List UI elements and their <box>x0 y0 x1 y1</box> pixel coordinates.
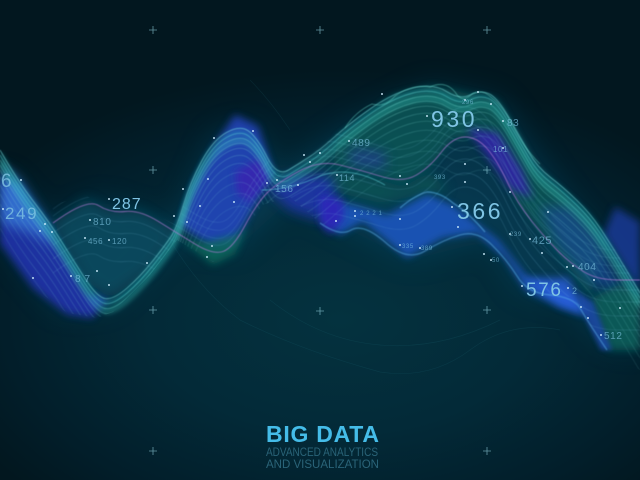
mid-size numbers: 425 <box>532 235 552 247</box>
upper blue patch <box>350 148 385 170</box>
right blue shoulder <box>540 207 626 296</box>
partial number 6: 6 <box>1 171 12 192</box>
wave: soft outer glow <box>0 85 640 350</box>
mid-size numbers: 393 <box>434 175 446 181</box>
left blue and violet lobe <box>0 180 108 318</box>
mid-size numbers: 83 <box>507 118 519 129</box>
title block <box>266 421 379 471</box>
large number 576: 576 <box>526 280 563 301</box>
large number 366: 366 <box>457 198 503 224</box>
number 287: 287 <box>112 196 142 213</box>
middle blue band <box>322 194 586 316</box>
mid-size numbers: 50 <box>492 258 500 264</box>
mid-size numbers: 120 <box>112 237 127 246</box>
mid-size numbers: 8 7 <box>75 274 91 285</box>
mid-size numbers <box>75 100 622 342</box>
central violet patch <box>235 158 270 203</box>
wave: middle band edges <box>320 192 607 350</box>
mid-size numbers: 2 2 2 1 <box>360 211 383 217</box>
lower right blue edge <box>577 292 612 350</box>
mid-size numbers: 239 <box>510 232 522 238</box>
green lower crossing <box>182 226 248 265</box>
data dots <box>2 91 621 336</box>
mid-size numbers: 2 <box>572 286 578 296</box>
far right blue <box>604 207 640 290</box>
mid-size numbers: 389 <box>421 246 433 252</box>
wave: glow fills <box>0 86 640 350</box>
wave: magenta trace line <box>53 137 640 280</box>
left bright upper blue <box>0 165 56 245</box>
subtitle line 2: AND VISUALIZATION <box>266 457 379 471</box>
contour family from magenta line <box>53 107 640 330</box>
faint background wave lines <box>170 80 560 374</box>
mid-size numbers: 489 <box>352 138 370 149</box>
mid-size numbers: 456 <box>88 237 103 246</box>
mid-size numbers: 512 <box>604 331 622 342</box>
upper violet core <box>467 128 532 198</box>
wave: link strand <box>262 172 385 190</box>
upper green mass <box>333 86 608 295</box>
bright blue 576 zone <box>522 278 588 315</box>
mid-size numbers: 296 <box>462 100 474 106</box>
central blue wedge <box>180 115 274 248</box>
wave: bright upper edge <box>0 86 640 311</box>
mid-size numbers: 335 <box>402 244 414 250</box>
contour family from upper edge <box>0 91 640 377</box>
wave: contour lines <box>0 91 640 377</box>
mid-size numbers: 101 <box>493 145 508 154</box>
number 249: 249 <box>5 204 38 223</box>
subtitle line 1: ADVANCED ANALYTICS <box>266 447 378 459</box>
mid-size numbers: 404 <box>578 262 596 273</box>
left underside teal <box>53 198 177 298</box>
blue link band <box>265 175 338 220</box>
mid-size numbers: 156 <box>275 184 294 195</box>
mid-size numbers: 114 <box>339 173 355 183</box>
data labels <box>1 100 622 342</box>
large number 930: 930 <box>431 106 477 132</box>
lower green below the magenta line <box>322 167 448 203</box>
mid-size numbers: 810 <box>93 217 112 228</box>
wave: irregular crest strand <box>345 84 540 164</box>
grid crosshairs <box>149 26 491 455</box>
lower right green <box>592 284 640 350</box>
title: BIG DATA: BIG DATA <box>266 421 379 447</box>
violet left of middle band <box>320 195 343 234</box>
